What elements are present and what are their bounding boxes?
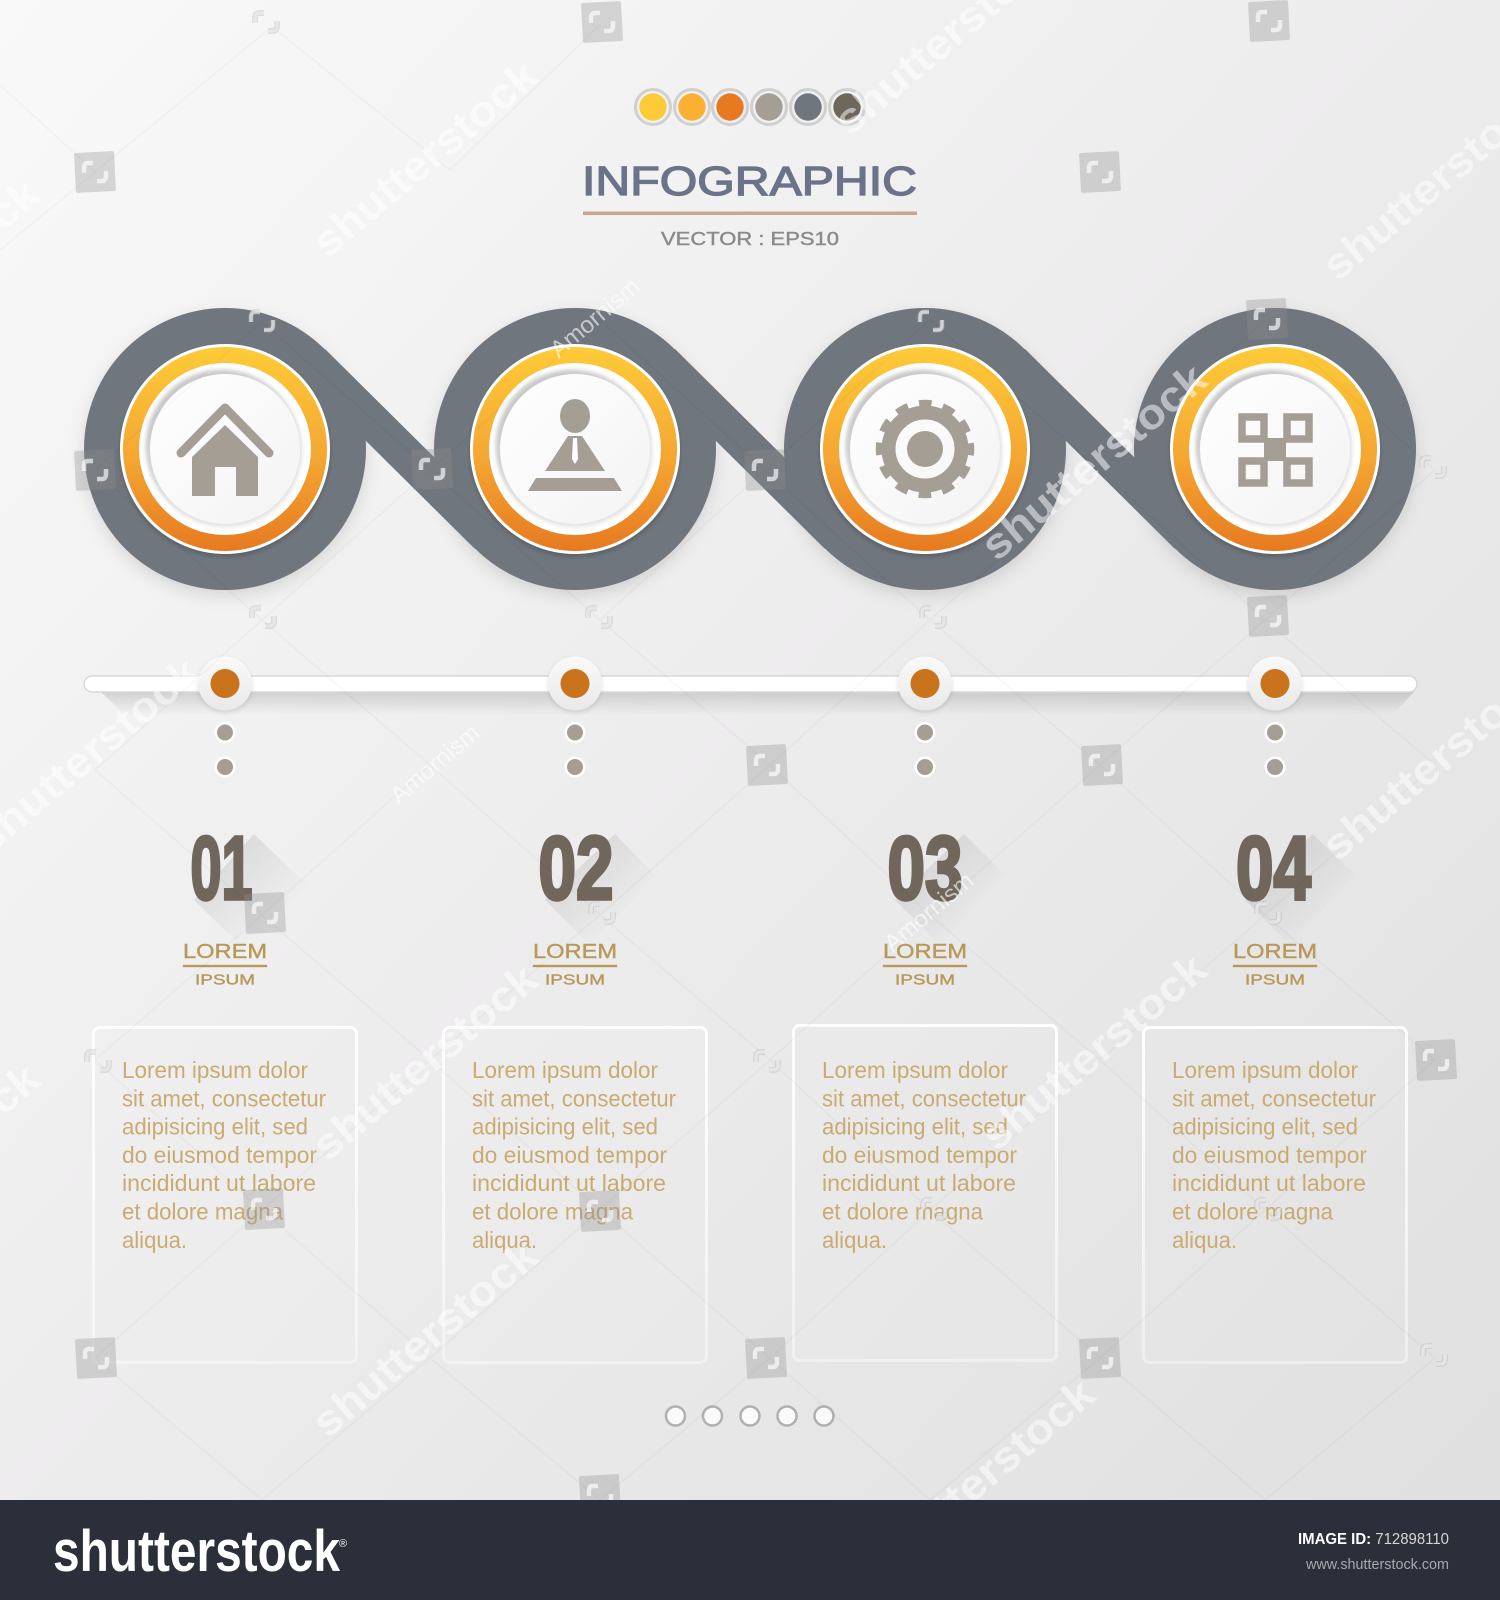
watermark contributor text: [385, 273, 979, 957]
timeline node 1: [198, 656, 252, 778]
panel: text box 3: [794, 1026, 1056, 1360]
panel: text box 2: Lorem ipsum dolor: [472, 1057, 658, 1083]
icon: house: [181, 408, 269, 496]
number 01: [190, 819, 310, 945]
label 3: lorem ipsum: [883, 941, 967, 988]
color palette dots: [636, 90, 864, 124]
step 1 icon disc: house: [120, 344, 330, 557]
panel: text box 4: [1144, 1028, 1406, 1362]
step 3 icon disc: gear: [820, 344, 1030, 557]
timeline node 2: [548, 656, 602, 778]
panel: text box 2: incididunt ut labore: [472, 1170, 666, 1196]
panel: text box 1: sit amet, consectetur: [122, 1085, 326, 1111]
label 1: lorem ipsum: IPSUM: [195, 972, 255, 988]
number 03: [888, 819, 1005, 945]
ribbon chain of four circles: [84, 308, 1416, 596]
number 02: [538, 819, 655, 945]
step 2 icon disc: person: [470, 344, 680, 557]
title underline: [583, 212, 917, 215]
panel: text box 4: sit amet, consectetur: [1172, 1085, 1376, 1111]
panel: text box 4: adipisicing elit, sed: [1172, 1114, 1358, 1140]
panel: text box 3: incididunt ut labore: [822, 1170, 1016, 1196]
watermark text: shutterstock: [860, 1369, 1104, 1585]
number 04: [1236, 819, 1355, 945]
label 3: lorem ipsum: LOREM: [883, 941, 967, 963]
watermark logo outlines: [87, 13, 1445, 1364]
panel: text box 1: incididunt ut labore: [122, 1170, 316, 1196]
footer registered mark: ®: [339, 1538, 347, 1550]
panel: text box 3: do eiusmod tempor: [822, 1142, 1017, 1168]
panel: text box 1: [94, 1028, 356, 1362]
panel: text box 3: et dolore magna: [822, 1198, 983, 1224]
icon: grid squares: [1242, 417, 1309, 483]
watermark contributor text: Amornism: [385, 719, 485, 809]
ribbon circles: [84, 308, 1416, 590]
watermark text: shutterstock: [303, 954, 547, 1170]
panel: text box 2: aliqua.: [472, 1227, 537, 1253]
timeline node 4: [1248, 656, 1302, 778]
number 03: 03: [888, 819, 962, 919]
panel: text box 1: et dolore magna: [122, 1198, 283, 1224]
icon: person at desk: [528, 399, 622, 491]
panel: text box 4: et dolore magna: [1172, 1198, 1333, 1224]
panel: text box 1: Lorem ipsum dolor: [122, 1057, 308, 1083]
label 2: lorem ipsum: LOREM: [533, 941, 617, 963]
panel: text box 1: aliqua.: [122, 1227, 187, 1253]
panel: text box 2: et dolore magna: [472, 1198, 633, 1224]
label 4: lorem ipsum: IPSUM: [1245, 972, 1305, 988]
label 4: lorem ipsum: LOREM: [1233, 941, 1317, 963]
footer logo: shutterstock: [53, 1519, 341, 1584]
panel: text box 1: do eiusmod tempor: [122, 1142, 317, 1168]
watermark text: shutterstock: [972, 354, 1216, 570]
ribbon shadow: [84, 314, 1416, 596]
ribbon diagonal links: [300, 349, 1175, 549]
panel: text box 3: sit amet, consectetur: [822, 1085, 1026, 1111]
panel: text box 2: [444, 1028, 706, 1362]
panel: text box 3: aliqua.: [822, 1227, 887, 1253]
watermark text: shutterstock: [972, 944, 1216, 1160]
subtitle: VECTOR : EPS10: [661, 229, 839, 249]
panel: text box 2: sit amet, consectetur: [472, 1085, 676, 1111]
timeline bar: [84, 676, 1417, 715]
pagination dots: [666, 1406, 834, 1426]
label 4: lorem ipsum: [1233, 941, 1317, 988]
number 01: 01: [190, 819, 252, 919]
footer image id: IMAGE ID: 712898110: [1298, 1531, 1449, 1548]
watermark text: shutterstock: [303, 1231, 547, 1447]
watermark contributor text: Amornism: [545, 273, 645, 363]
label 1: lorem ipsum: LOREM: [183, 941, 267, 963]
panel: text box 4: aliqua.: [1172, 1227, 1237, 1253]
panel: text box 4: do eiusmod tempor: [1172, 1142, 1367, 1168]
panel: text box 2: adipisicing elit, sed: [472, 1114, 658, 1140]
footer url: www.shutterstock.com: [1305, 1556, 1449, 1573]
panel: text box 2: do eiusmod tempor: [472, 1142, 667, 1168]
number 02: 02: [538, 819, 614, 919]
footer bar: [0, 1500, 1500, 1600]
panel: text box 3: adipisicing elit, sed: [822, 1114, 1008, 1140]
title: INFOGRAPHIC: [582, 158, 917, 204]
icon: gear: [880, 404, 970, 494]
step 4 icon disc: grid: [1170, 344, 1380, 557]
panel: text box 4: Lorem ipsum dolor: [1172, 1057, 1358, 1083]
panel: text box 1: adipisicing elit, sed: [122, 1114, 308, 1140]
label 2: lorem ipsum: IPSUM: [545, 972, 605, 988]
watermark contributor text: Amornism: [879, 867, 979, 957]
label 1: lorem ipsum: [183, 941, 267, 988]
panel: text box 3: Lorem ipsum dolor: [822, 1057, 1008, 1083]
watermark text: shutterstock: [303, 51, 547, 267]
panel: text box 4: incididunt ut labore: [1172, 1170, 1366, 1196]
label 3: lorem ipsum: IPSUM: [895, 972, 955, 988]
label 2: lorem ipsum: [533, 941, 617, 988]
timeline node 3: [898, 656, 952, 778]
number 04: 04: [1236, 819, 1311, 919]
